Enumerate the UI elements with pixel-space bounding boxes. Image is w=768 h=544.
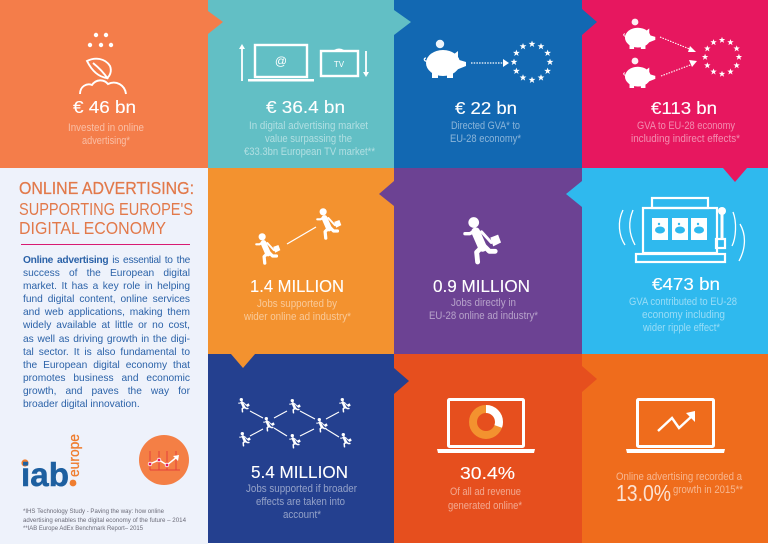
intro text: market. It has a key role in helping bbox=[23, 281, 190, 292]
panel: invested bbox=[0, 0, 208, 168]
panel: market value: € 36.4 bn bbox=[266, 97, 345, 117]
panel: market value: In digital advertising market bbox=[249, 120, 368, 132]
arrow: navy to red bbox=[394, 368, 409, 394]
panel: direct jobs: EU-28 online ad industry* bbox=[429, 310, 539, 322]
panel: broader jobs: Jobs supported if broader bbox=[246, 483, 357, 495]
panel: ripple effect: GVA contributed to EU-28 bbox=[629, 296, 737, 308]
icon: growth chart badge bbox=[139, 435, 189, 485]
icon: slot machine bbox=[619, 198, 744, 262]
panel: direct jobs: 0.9 MILLION bbox=[433, 276, 530, 296]
footnotes bbox=[23, 508, 186, 532]
panel: wider jobs: wider online ad industry* bbox=[243, 311, 352, 323]
panel: market value: €33.3bn European TV market** bbox=[244, 146, 376, 158]
icon: two piggy banks to EU bbox=[624, 19, 742, 88]
icon: two runners bbox=[256, 208, 341, 263]
panel: indirect GVA bbox=[582, 0, 768, 168]
intro text bbox=[23, 254, 193, 414]
heading: DIGITAL ECONOMY bbox=[19, 218, 166, 238]
panel: broader jobs: effects are taken into bbox=[256, 496, 345, 508]
panel: market value bbox=[208, 0, 394, 168]
panel: growth: Online advertising recorded a bbox=[616, 471, 743, 483]
icon: laptop and TV: @ bbox=[275, 54, 287, 68]
arrow: orange to navy bbox=[231, 354, 255, 368]
logo: iab europe bbox=[21, 434, 83, 493]
panel: ad revenue: 30.4% bbox=[460, 463, 515, 483]
footnotes: *IHS Technology Study - Paving the way: how online bbox=[23, 508, 164, 515]
intro text: success of the European digital bbox=[23, 268, 190, 279]
panel: ripple effect: economy including bbox=[642, 309, 725, 321]
panel: invested: € 46 bn bbox=[73, 97, 136, 117]
intro text: Online advertising is essential to the bbox=[23, 255, 190, 266]
intro text: growth, and paves the way for bbox=[23, 386, 190, 397]
panel: growth bbox=[582, 354, 768, 543]
intro text: tal sector. It is also fundamental to bbox=[23, 347, 190, 358]
panel: broader jobs: 5.4 MILLION bbox=[251, 462, 348, 482]
panel: growth: growth in 2015** bbox=[673, 484, 744, 496]
intro text: broader digital innovation. bbox=[23, 399, 140, 410]
arrow: purple to orange bbox=[379, 181, 394, 206]
panel: direct GVA bbox=[394, 0, 582, 168]
icon: piggy bank to EU bbox=[424, 40, 553, 83]
logo: iab europe: iab bbox=[21, 456, 69, 493]
icon: runner bbox=[465, 217, 501, 262]
panel: direct GVA: EU-28 economy* bbox=[450, 133, 522, 145]
panel: ripple effect: €473 bn bbox=[652, 274, 720, 294]
panel: broader jobs: account* bbox=[283, 509, 322, 521]
panel: ad revenue: Of all ad revenue bbox=[450, 486, 521, 498]
arrow: pink to cyan bbox=[723, 168, 747, 182]
panel: broader jobs bbox=[208, 354, 394, 543]
panel: wider jobs bbox=[208, 168, 394, 354]
arrow: red to orange bbox=[582, 366, 597, 392]
panel: indirect GVA: €113 bn bbox=[651, 98, 717, 118]
panel: ad revenue bbox=[394, 354, 582, 543]
icon: laptop with trend arrow bbox=[626, 400, 725, 453]
icon: laptop and TV bbox=[239, 44, 369, 82]
panel: ripple effect bbox=[582, 168, 768, 354]
footnotes: **IAB Europe AdEx Benchmark Report– 2015 bbox=[23, 525, 143, 532]
panel: indirect GVA: including indirect effects* bbox=[631, 133, 741, 145]
panel: wider jobs: Jobs supported by bbox=[257, 298, 337, 310]
intro text: promotes business and economic bbox=[23, 373, 190, 384]
panel: invested: Invested in online bbox=[68, 122, 144, 134]
intro text: the European digital economy that bbox=[23, 360, 190, 371]
panel: growth: 13.0% bbox=[616, 480, 671, 506]
intro text: fund digital content, online services bbox=[23, 294, 190, 305]
heading: ONLINE ADVERTISING: bbox=[19, 178, 194, 198]
panel: direct GVA: € 22 bn bbox=[455, 98, 517, 118]
panel: indirect GVA: GVA to EU-28 economy bbox=[637, 120, 735, 132]
footnotes: advertising enables the digital economy of the future – 2014 bbox=[23, 517, 186, 524]
panel: direct jobs bbox=[394, 168, 582, 354]
panel: invested: advertising* bbox=[82, 135, 131, 147]
icon: laptop and TV: TV bbox=[334, 60, 345, 69]
heading bbox=[19, 178, 194, 238]
panel: ad revenue: generated online* bbox=[448, 500, 523, 512]
arrow: cyan to purple bbox=[566, 181, 582, 207]
intro text: and web applications, making them bbox=[23, 307, 190, 318]
arrow: blue to pink bbox=[582, 9, 597, 35]
arrow: teal to blue bbox=[394, 10, 411, 35]
panel: market value: value surpassing the bbox=[265, 133, 352, 145]
panel: direct GVA: Directed GVA* to bbox=[451, 120, 520, 132]
intro text: widely available at little or no cost, bbox=[23, 320, 190, 331]
icon: laptop with donut bbox=[437, 400, 535, 453]
panel: ripple effect: wider ripple effect* bbox=[642, 322, 721, 334]
icon: seedling bbox=[80, 33, 126, 94]
arrow: orange to teal bbox=[208, 11, 223, 34]
icon: runner network bbox=[239, 398, 352, 448]
intro text: as well as driving growth in the digi- bbox=[23, 334, 190, 345]
panel: direct jobs: Jobs directly in bbox=[451, 297, 516, 309]
logo: iab europe: europe bbox=[66, 434, 83, 477]
panel: sidebar bbox=[0, 168, 208, 544]
heading: SUPPORTING EUROPE'S bbox=[19, 199, 193, 219]
panel: wider jobs: 1.4 MILLION bbox=[250, 276, 344, 296]
